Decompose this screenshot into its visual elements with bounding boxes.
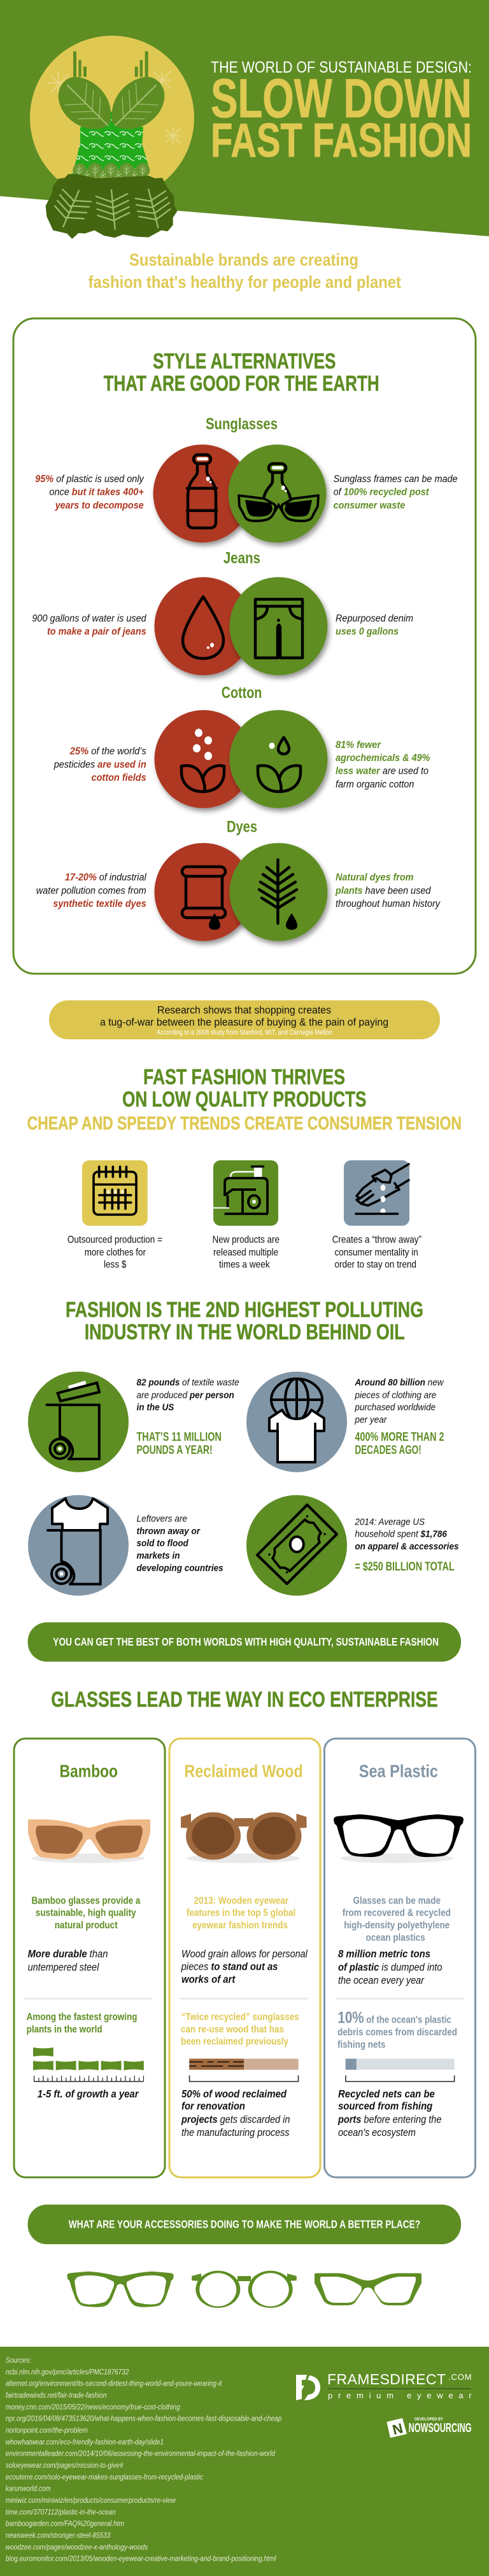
text: wood facts: 2013: Wooden eyewear [194,1895,288,1906]
captions: fast fashion causes: Creates a “throw away” [332,1235,422,1246]
text: bamboo facts: Bamboo glasses provide a [32,1895,140,1906]
text: bamboo facts [25,1895,153,2035]
panel: sea plastic: Sea Plastic [359,1761,438,1781]
chart: wood reclaimed bar [189,2059,299,2081]
text: clothing purchased: DECADES AGO! [355,1443,422,1457]
title [211,59,472,167]
text: natural dyes: Natural dyes from [336,872,414,883]
captions: fast fashion causes: more clothes for [85,1247,146,1258]
text: wood discarded [181,2088,290,2138]
icon: globe and shirt [246,1372,347,1472]
text: plastic facts: the ocean every year [338,1974,425,1986]
icon: plastic glasses [334,1814,464,1863]
sources list: time.com/3707112/plastic-in-the-ocean [6,2507,116,2516]
heading: style alternatives: STYLE ALTERNATIVES [153,349,336,373]
sources list: ecouterre.com/solo-eyewear-makes-sunglasses-from-recycled-plastic [6,2472,203,2481]
sources list: fairtradewinds.net/fair-trade-fashion [6,2391,107,2400]
text: natural dyes: throughout human history [336,899,441,909]
text: wood discarded: 50% of wood reclaimed [181,2088,287,2100]
text: natural dyes [335,872,441,909]
text: recycled nets: Recycled nets can be [338,2088,435,2100]
footer band [0,2347,489,2576]
illustration: leaf dress [30,36,194,239]
text: plastic fact: once but it takes 400+ [49,487,144,498]
text: recycled nets [337,2088,442,2138]
text: household spending: household spent $1,786 [355,1529,447,1540]
text: water for jeans: to make a pair of jeans [47,627,146,637]
text: bamboo facts: Among the fastest growing [27,2012,137,2023]
text: plastic facts: from recovered & recycled [343,1908,451,1919]
text: pesticides: pesticides are used in [53,759,146,770]
text: wood facts: works of art [181,1973,236,1985]
text: textile waste: POUNDS A YEAR! [136,1443,213,1457]
text: recycled frames fact: Sunglass frames can be made [334,474,458,485]
chart: bamboo growth [33,2047,144,2081]
sources list: karunworld.com [6,2484,51,2493]
callout: research pill: Research shows that shopping creates [157,1004,331,1016]
sources list: Sources: [6,2356,31,2365]
icon: trash can [28,1372,129,1472]
text: plastic facts: of plastic is dumped into [338,1961,442,1973]
dyes comparison icons [154,843,327,941]
icon: green glasses row [67,2271,422,2308]
text: plastic fact: years to decompose [55,500,144,511]
subtitle: fashion that's healthy for people and planet [89,273,401,292]
panel: bamboo [14,1739,165,2177]
text: clothing purchased: Around 80 billion new [354,1377,444,1388]
text: recycled nets: sourced from fishing [338,2100,433,2112]
heading: fashion is 2nd highest polluter [66,1298,423,1344]
icon: wood sunglasses [181,1812,307,1863]
text: household spending: on apparel & accessories [355,1541,458,1552]
text: plastic facts: debris comes from discarded [337,2027,457,2038]
heading: fast fashion thrives: FAST FASHION THRIVES [143,1065,345,1089]
text: clothing purchased [354,1377,444,1457]
sources list: nortonpoint.com/the-problem [6,2426,88,2435]
text: textile dyes: water pollution comes from [36,885,146,896]
subtitle [89,250,401,292]
text: recycled nets: ports before entering the [337,2113,442,2125]
text: recycled nets: ocean's ecosystem [338,2126,416,2138]
text: plastic facts: high-density polyethylene [344,1920,450,1931]
jeans comparison icons [154,577,327,675]
text: textile waste [136,1377,239,1457]
text: household spending [354,1516,458,1574]
text: wood facts: features in the top 5 global [187,1908,295,1919]
heading: style alternatives [104,349,379,396]
heading: fast fashion thrives [27,1065,462,1134]
text: household spending: 2014: Average US [354,1516,425,1527]
text: recycled frames fact: of 100% recycled post [334,487,429,498]
sources list: alternet.org/environment/its-second-dirtiest-thing-world-and-youre-wearing-it [6,2379,222,2388]
text: wood facts: can re-use wood that has [181,2024,284,2035]
text: organic cotton: 81% fewer [336,739,381,750]
logo: nowsourcing [386,2418,472,2438]
icon: throw away hand [344,1160,409,1226]
text: plastic facts [336,1895,464,2051]
heading: fast fashion thrives: ON LOW QUALITY PRODUCTS [122,1088,367,1112]
text: household spending: = $250 BILLION TOTAL [355,1560,455,1574]
text: wood facts [180,1895,308,2047]
icon: banknote [246,1495,347,1596]
text: textile dyes: synthetic textile dyes [53,899,146,909]
text: textile waste: THAT’S 11 MILLION [136,1430,222,1444]
panel: sea plastic [325,1739,475,2177]
callout: research pill: According to a 2008 study from Stanford, MIT, and Carnegie Mellon [157,1029,332,1037]
icon: bamboo sunglasses [28,1819,150,1863]
text: wood facts: been reclaimed previously [181,2037,288,2047]
sources list: bamboogarden.com/FAQ%20general.htm [6,2519,124,2528]
text: repurposed denim: uses 0 gallons [336,627,399,637]
panel: style alternatives [13,318,476,974]
text: textile waste: in the US [136,1402,174,1413]
callout: research pill: a tug-of-war between the pleasure of buying & the pain of paying [100,1016,388,1028]
callout: accessories question [28,2205,461,2244]
sources list: environmentalleader.com/2014/10/06/assessing-the-environmental-impact-of-the-fashion-world [6,2449,275,2458]
captions: fast fashion causes: Outsourced production = [67,1235,162,1246]
text: pesticides: 25% of the world’s [69,746,146,757]
subtitle: Sustainable brands are creating [129,250,358,269]
text: bamboo facts: plants in the world [27,2024,103,2035]
text: recycled frames fact [334,474,458,511]
text: leftovers: markets in [136,1550,180,1562]
captions: fast fashion causes: consumer mentality in [335,1247,418,1258]
text: bamboo facts: natural product [55,1920,118,1931]
text: organic cotton: farm organic cotton [336,779,414,790]
text: clothing purchased: 400% MORE THAN 2 [355,1430,444,1444]
text: plastic fact: 95% of plastic is used only [35,474,145,485]
text: textile waste: 82 pounds of textile waste [136,1377,239,1388]
captions: fast fashion causes: released multiple [213,1247,278,1258]
text: leftovers: developing countries [136,1563,223,1574]
text: organic cotton [336,739,430,790]
text: plastic fact [35,474,145,511]
header band [0,0,489,236]
panel: bamboo: Bamboo [60,1761,118,1781]
cotton heading: Cotton [222,685,262,702]
sources list: npr.org/2016/04/08/473513620/what-happens-when-fashion-becomes-fast-disposable-and-cheap [6,2414,282,2423]
dyes heading: Dyes [227,819,257,836]
sunglasses comparison icons [153,445,326,543]
panel: bamboo: 1-5 ft. of growth a year [38,2088,139,2100]
sources list: blog.euromonitor.com/2013/05/wooden-eyewear-creative-marketing-and-brand-positioning.html [6,2554,276,2563]
logo: framesdirect: premium eyewear [328,2391,472,2400]
logo: framesdirect: FRAMESDIRECT [327,2371,446,2387]
text: pesticides [53,746,146,783]
icon: sewing machine [213,1160,278,1226]
text: bamboo facts: sustainable, high quality [36,1908,136,1919]
callout: best of both worlds [28,1623,461,1662]
sources list: ncbi.nlm.nih.gov/pmc/articles/PMC1876732 [6,2367,129,2376]
sources list: newsweek.com/stronger-steel-85533 [6,2531,111,2540]
logo: nowsourcing: N [391,2420,404,2438]
text: bamboo facts: More durable than [28,1947,108,1960]
text: clothing purchased: pieces of clothing are [354,1390,436,1400]
sources list [6,2356,282,2563]
icon: calendar [82,1160,148,1226]
text: plastic facts: Glasses can be made [353,1895,441,1906]
captions: fast fashion causes: less $ [104,1260,126,1270]
icon: shirt in bin [28,1495,129,1596]
captions: fast fashion causes: order to stay on trend [335,1260,416,1270]
text: wood discarded: for renovation [181,2100,245,2112]
sources list: money.cnn.com/2015/05/22/news/economy/true-cost-clothing [6,2402,180,2411]
text: wood facts: Wood grain allows for personal [181,1947,308,1960]
text: repurposed denim [336,613,413,637]
jeans heading: Jeans [223,550,260,567]
text: organic cotton: agrochemicals & 49% [336,753,430,764]
text: leftovers: sold to flood [136,1538,189,1549]
callout: research pill [49,1000,440,1039]
text: clothing purchased: purchased worldwide [355,1402,436,1413]
captions: fast fashion causes: times a week [219,1260,271,1270]
text: plastic facts: fishing nets [337,2040,385,2051]
sources list: miniwiz.com/miniwiz/en/products/consumerproducts/re-view [6,2496,176,2505]
heading: fashion is 2nd highest polluter: INDUSTRY IN THE WORLD BEHIND OIL [85,1320,405,1344]
panel: reclaimed wood [169,1739,320,2177]
text: textile dyes: 17-20% of industrial [65,872,146,883]
sunglasses heading: Sunglasses [206,416,278,433]
text: wood facts: pieces to stand out as [181,1961,278,1973]
text: water for jeans [32,613,147,637]
panel: reclaimed wood: Reclaimed Wood [185,1761,303,1781]
logo: framesdirect: .COM [448,2372,472,2382]
text: wood discarded: the manufacturing process [181,2126,290,2138]
text: plastic facts: 10% of the ocean's plastic [337,2009,451,2027]
text: plastic facts: ocean plastics [365,1932,425,1943]
captions: fast fashion causes [67,1235,422,1270]
text: leftovers: thrown away or [136,1526,201,1537]
chart: ocean debris bar [346,2059,455,2081]
text: water for jeans: 900 gallons of water is used [32,613,147,624]
text: leftovers [136,1513,223,1574]
heading: style alternatives: THAT ARE GOOD FOR THE EARTH [104,372,379,396]
text: plastic facts: 8 million metric tons [338,1947,430,1960]
text: textile waste: are produced per person [136,1390,234,1400]
text: textile dyes [36,872,146,909]
sources list: woodzee.com/pages/woodzee-x-anthology-woods [6,2542,148,2551]
text: bamboo facts: untempered steel [28,1961,99,1973]
sources list: whowhatwear.com/eco-friendly-fashion-earth-day/slide1 [6,2437,164,2446]
text: wood facts: eyewear fashion trends [192,1920,288,1931]
logo: framesdirect [296,2371,472,2400]
text: repurposed denim: Repurposed denim [336,613,413,624]
text: clothing purchased: per year [354,1414,387,1425]
text: organic cotton: less water are used to [336,766,429,777]
captions: fast fashion causes: New products are [213,1235,280,1246]
text: pesticides: cotton fields [92,772,146,783]
logo: nowsourcing: DEVELOPED BY [415,2418,443,2422]
cotton comparison icons [154,710,327,808]
text: recycled frames fact: consumer waste [334,500,406,511]
text: wood discarded: projects gets discarded in [181,2113,290,2125]
text: natural dyes: plants have been used [335,885,432,896]
sources list: soloeyewear.com/pages/mission-to-give# [6,2461,124,2470]
text: wood facts: “Twice recycled” sunglasses [181,2012,299,2023]
text: leftovers: Leftovers are [136,1513,187,1524]
